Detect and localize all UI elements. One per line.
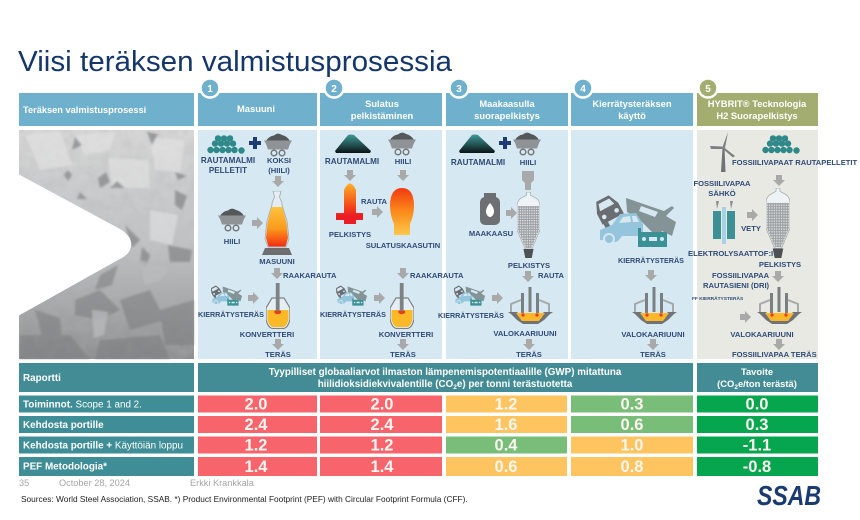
header: Maakaasulla suorapelkistys: Maakaasulla: [479, 98, 535, 109]
label: steel: TERÄS: [640, 350, 666, 359]
header: Maakaasulla suorapelkistys: [446, 93, 568, 126]
panel: HYBRIT: [692, 130, 818, 359]
icon: ore pile: [335, 134, 371, 153]
label: iron ore pellets: PELLETIT: [209, 166, 247, 175]
arrow: [773, 175, 785, 186]
arrow: [772, 271, 784, 282]
number badge 1: [200, 78, 220, 98]
icon: scrap large: [592, 193, 676, 247]
arrow: [747, 209, 758, 221]
icon: coke cart: [264, 134, 292, 156]
number badge 2: 2: [331, 84, 337, 95]
table row: Kehdosta portille: [19, 416, 818, 434]
icon: converter: [266, 283, 290, 328]
sources note: Sources: World Steel Association, SSAB. *) Product Environmental Footprint (PEF) with Circular Footprint Formula (CFF).: [21, 494, 468, 504]
icon: coal cart: [513, 133, 541, 155]
icon: wind turbine: [710, 132, 735, 172]
panel: Sulatuspelkistäminen: [320, 130, 442, 359]
label: converter: KONVERTTERI: [379, 330, 433, 339]
icon: gas cylinder: [480, 193, 500, 225]
icon: converter: [390, 283, 414, 328]
icon: plus: [249, 137, 261, 149]
label: pig iron, smelting route: RAAKARAUTA: [410, 271, 464, 280]
icon: ore pile: [459, 134, 495, 153]
label: EAF: VALOKAARIUUNI: [621, 330, 685, 339]
table row: Toiminnot: 0.0: [746, 396, 768, 414]
table row: PEF Metodologia: -0.8: [743, 458, 771, 476]
header: process label: Teräksen valmistusprosessi: [23, 105, 146, 115]
label: fossil-free electricity: SÄHKÖ: [708, 189, 736, 198]
arrow: [522, 271, 534, 282]
table: target header: (CO: [717, 378, 734, 389]
table row: Kehdosta portille + Käyttöiän loppu: -1.1: [743, 436, 771, 454]
table: GWP header: hiilidioksidiekvivalentille (CO: [318, 379, 453, 390]
label: scrap: KIERRÄTYSTERÄS: [618, 256, 684, 265]
label: fossil-free steel: FOSSIILIVAPAA TERÄS: [732, 350, 817, 359]
footer: author: Erkki Krankkala: [190, 478, 255, 488]
arrow: feed: [522, 171, 534, 190]
panel: Kierrätysteräksen käyttö: [571, 130, 693, 359]
table row: Toiminnot: 2.0: [245, 396, 267, 414]
icon: smelt reduction vessel: [336, 184, 363, 224]
header: Sulatus pelkistäminen: [320, 93, 442, 126]
label: reduction: PELKISTYS: [508, 261, 550, 270]
table: target header: 2: [734, 384, 738, 391]
arrow: [645, 270, 657, 281]
label: fossil-free sponge iron: RAUTASIENI (DRI): [703, 281, 770, 290]
table row: Kehdosta portille + Käyttöiän loppu: [19, 436, 818, 454]
title: Viisi teräksen valmistusprosessia: [18, 46, 452, 78]
header: Sulatus pelkistäminen: Sulatus: [365, 98, 399, 109]
label: iron ore: RAUTAMALMI: [451, 158, 505, 167]
header: Kierrätysteräksen käyttö: Kierrätysteräksen: [592, 98, 672, 109]
label: EAF: VALOKAARIUUNI: [493, 329, 557, 338]
arrow: [397, 268, 409, 279]
icon: plus: [499, 137, 511, 149]
label: EAF: VALOKAARIUUNI: [730, 330, 794, 339]
label: scrap: KIERRÄTYSTERÄS: [320, 310, 386, 319]
label: steel: TERÄS: [390, 350, 416, 359]
label: electrolyser: ELEKTROLYSAATTOF:I: [688, 249, 773, 258]
label: iron: RAUTA: [538, 271, 565, 280]
arrow: [647, 339, 659, 350]
label: coke: (HIILI): [268, 166, 290, 175]
icon: blast furnace: [262, 191, 292, 255]
icon: scrap: [334, 285, 367, 306]
footer: slide number: 35: [19, 478, 29, 488]
table row: Kehdosta portille: 1.6: [495, 416, 517, 434]
icon: scrap: [452, 285, 485, 306]
arrow: [523, 339, 535, 350]
header: Masuuni: Masuuni: [237, 103, 275, 114]
label: reduction: PELKISTYS: [329, 230, 371, 239]
arrow: [252, 217, 263, 229]
label: natural gas: MAAKAASU: [469, 229, 514, 238]
label: converter: KONVERTTERI: [240, 330, 294, 339]
table row: Toiminnot: 1.2: [495, 396, 517, 414]
logo: SSAB: SSAB: [757, 480, 821, 511]
table: GWP header: 2: [453, 384, 457, 391]
arrow: [773, 339, 785, 350]
table row: PEF Metodologia: 0.8: [621, 458, 643, 476]
label: coal: HIILI: [224, 237, 240, 246]
header: HYBRIT: HYBRIT® Tecknologia: [708, 98, 807, 109]
icon: electric arc furnace: [508, 287, 553, 324]
label: iron: RAUTA: [361, 197, 388, 206]
icon: iron ore pellets: [207, 135, 245, 154]
arrow: [397, 339, 409, 350]
header: process label: [19, 93, 194, 126]
label: FF scrap: FF KIERRÄTYSTERÄS: [692, 295, 744, 302]
icon: melter gasifier: [390, 188, 414, 235]
label: coal: HIILI: [520, 158, 536, 167]
label: melter gasifier: SULATUSKAASUTIN: [366, 241, 440, 250]
table row: Toiminnot: 2.0: [371, 396, 393, 414]
number badge 5: [698, 78, 718, 98]
table row: PEF Metodologia: PEF Metodologia*: [23, 462, 107, 472]
arrow: [344, 170, 356, 181]
table: GWP header: e) per tonni terästuotetta: [457, 379, 573, 390]
table row: Kehdosta portille: 2.4: [245, 416, 268, 434]
icon: electrolyser: [713, 201, 735, 244]
table row: Kehdosta portille: Kehdosta portille: [23, 420, 104, 431]
header: HYBRIT: [697, 93, 818, 126]
label: scrap, natural gas route: KIERRÄTYSTERÄS: [438, 311, 504, 320]
table: GWP header: Tyypilliset globaaliarvot ilmaston lämpenemispotentiaalille (GWP) mitattuna: [269, 367, 622, 378]
label: hydrogen: VETY: [741, 224, 761, 233]
table row: Toiminnot: Toiminnot. Scope 1 and 2.: [23, 400, 142, 410]
number badge 5: 5: [705, 84, 711, 95]
label: iron ore: RAUTAMALMI: [325, 157, 379, 166]
table row: Kehdosta portille: 2.4: [371, 416, 394, 434]
label: blast furnace: MASUUNI: [259, 257, 295, 266]
label: steel: TERÄS: [516, 350, 542, 359]
number badge 1: 1: [207, 84, 213, 95]
header: HYBRIT: H2 Suorapelkistys: [716, 110, 798, 121]
table: report header: [19, 363, 194, 392]
table row: Kehdosta portille: 0.6: [621, 416, 643, 434]
table row: Toiminnot: [19, 396, 818, 414]
number badge 2: [324, 78, 344, 98]
arrow: [740, 311, 751, 323]
number badge 4: [574, 78, 592, 98]
icon: coal cart: [218, 209, 246, 231]
table: target header: [697, 363, 818, 392]
header: Kierrätysteräksen käyttö: [571, 93, 693, 126]
header: Maakaasulla suorapelkistys: suorapelkistys: [474, 110, 540, 121]
table: target header: e/ton terästä): [738, 378, 797, 389]
label: fossil-free electricity: FOSSIILIVAPAA: [693, 179, 751, 188]
icon: fossil-free pellets: [762, 135, 800, 154]
header: Kierrätysteräksen käyttö: käyttö: [618, 110, 646, 121]
table row: PEF Metodologia: 0.6: [495, 458, 517, 476]
table row: PEF Metodologia: 1.4: [371, 458, 394, 476]
arrow: [397, 170, 409, 181]
panel: Masuuni: [198, 130, 317, 359]
arrow: [372, 206, 383, 218]
footer: date: October 28, 2024: [59, 478, 130, 488]
number badge 3: 3: [456, 84, 462, 95]
table: target header: Tavoite: [741, 366, 773, 377]
arrow: [492, 292, 503, 304]
panel: Maakaasulla suorapelkistys: [446, 130, 568, 359]
table row: PEF Metodologia: 1.4: [245, 458, 268, 476]
label: reduction: PELKISTYS: [759, 260, 801, 269]
label: pig iron, blast furnace route: RAAKARAUTA: [283, 271, 337, 280]
table row: Kehdosta portille + Käyttöiän loppu: 0.4: [495, 436, 518, 454]
arrow: [374, 292, 385, 304]
icon: shaft furnace: [517, 192, 540, 258]
number badge 3: [450, 78, 468, 98]
icon: electric arc furnace: [757, 287, 802, 324]
label: fossil-free pellets: FOSSIILIVAPAAT RAUTAPELLETIT: [732, 158, 858, 167]
header: Sulatus pelkistäminen: pelkistäminen: [351, 110, 414, 121]
icon: scrap: [209, 285, 242, 306]
number badge 4: 4: [580, 84, 586, 95]
icon: coal cart: [388, 133, 416, 155]
label: steel: TERÄS: [265, 350, 291, 359]
arrow: [271, 268, 283, 279]
table: GWP header: [198, 363, 693, 392]
label: scrap: KIERRÄTYSTERÄS: [198, 310, 264, 319]
arrow: [248, 292, 259, 304]
arrow: [506, 207, 517, 219]
icon: shaft furnace: [766, 188, 790, 258]
table row: Kehdosta portille + Käyttöiän loppu: Kehdosta portille + Käyttöiän loppu: [23, 440, 183, 452]
table row: Kehdosta portille + Käyttöiän loppu: 1.2: [245, 436, 267, 454]
arrow: [272, 176, 284, 187]
table: report header: Raportti: [23, 373, 61, 384]
header row: [19, 93, 818, 126]
table row: Kehdosta portille + Käyttöiän loppu: 1.0: [621, 436, 643, 454]
arrow: [272, 339, 284, 350]
table row: Toiminnot: 0.3: [621, 396, 643, 414]
header: Masuuni: [198, 93, 317, 126]
label: coal: HIILI: [395, 157, 411, 166]
label: coke: KOKSI: [267, 156, 291, 165]
table row: PEF Metodologia: [19, 457, 818, 476]
table row: Kehdosta portille: 0.3: [746, 416, 768, 434]
steel surface photo with chevron cut-out: [18, 130, 194, 359]
table row: Kehdosta portille + Käyttöiän loppu: 1.2: [371, 436, 393, 454]
label: iron ore pellets: RAUTAMALMI: [201, 156, 255, 165]
label: fossil-free sponge iron: FOSSIILIVAPAA: [712, 271, 770, 280]
icon: electric arc furnace: [632, 287, 677, 324]
